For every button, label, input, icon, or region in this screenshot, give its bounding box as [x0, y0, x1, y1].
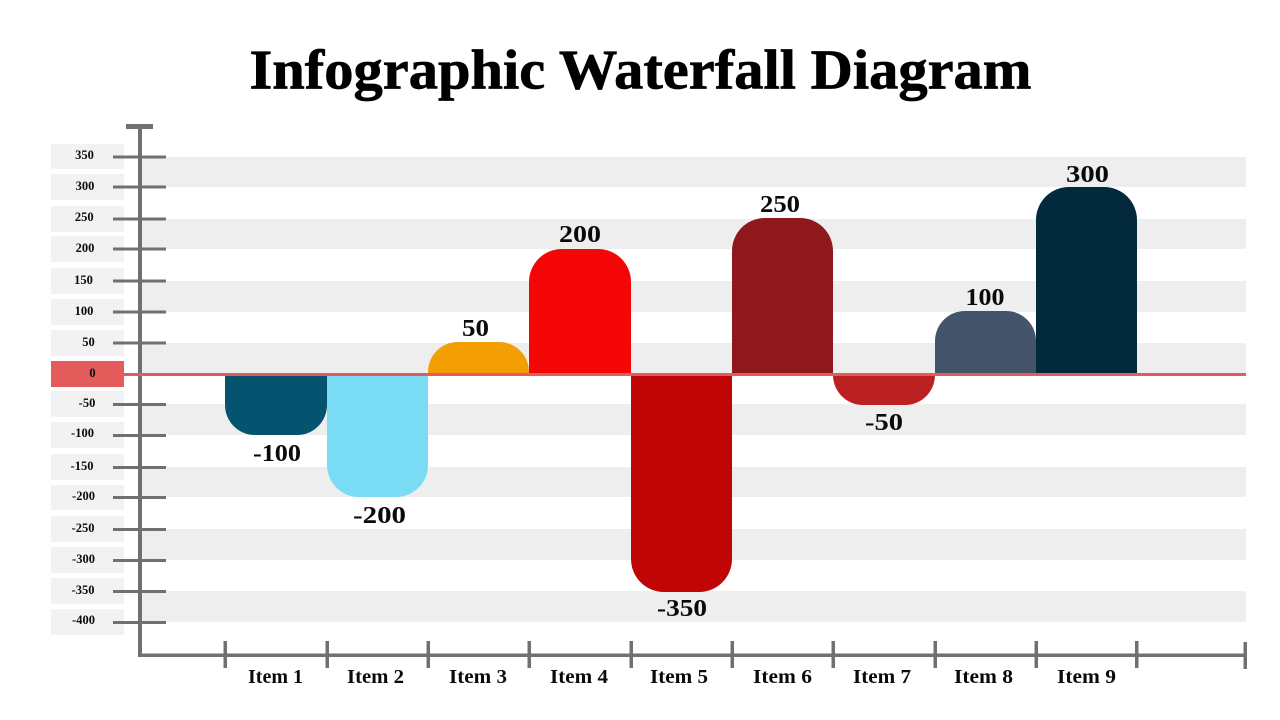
x-axis with ticks: [138, 641, 1247, 669]
bar value labels: 300: [1066, 162, 1109, 188]
y-axis with ticks: [113, 124, 166, 657]
bar value labels: 50: [462, 316, 489, 342]
y-axis value labels: 150: [74, 273, 93, 287]
bar: Item 6, 250: [732, 218, 833, 375]
y-axis value labels: 0: [89, 366, 96, 380]
y-axis value labels: -300: [72, 552, 95, 566]
zero baseline: [124, 373, 1246, 376]
y-axis value labels: 200: [76, 241, 94, 255]
y-axis value labels: 300: [76, 179, 94, 193]
x-axis item labels: Item 9: [1057, 667, 1116, 688]
y-axis value labels: 100: [75, 304, 93, 318]
bar: Item 8, 100: [935, 311, 1036, 375]
y-axis value labels: 250: [75, 210, 94, 224]
bar: Item 5, -350: [631, 375, 732, 592]
bar value labels: -100: [253, 441, 301, 467]
bar: Item 1, -100: [225, 375, 327, 435]
x-axis item labels: [248, 667, 1116, 688]
x-axis item labels: Item 8: [954, 667, 1013, 688]
x-axis item labels: Item 5: [650, 667, 708, 688]
y-axis value labels: -100: [71, 426, 94, 440]
x-axis item labels: Item 1: [248, 667, 303, 688]
x-axis item labels: Item 4: [550, 667, 608, 688]
y-axis value labels: -400: [72, 613, 95, 627]
x-axis item labels: Item 7: [853, 667, 911, 688]
chart background bands: [142, 157, 1246, 622]
bar: Item 9, 300: [1036, 187, 1137, 375]
x-axis item labels: Item 3: [449, 667, 507, 688]
bar value labels: [253, 162, 1109, 622]
bar: Item 7, -50: [833, 375, 935, 405]
y-axis value labels: -150: [71, 459, 93, 473]
bar value labels: -200: [353, 503, 406, 529]
bar: Item 4, 200: [529, 249, 631, 375]
x-axis item labels: Item 2: [347, 667, 404, 688]
y-axis value labels: [51, 144, 124, 635]
bar: Item 3, 50: [428, 342, 529, 375]
x-axis item labels: Item 6: [753, 667, 812, 688]
y-axis value labels: 350: [75, 148, 94, 162]
bar value labels: -50: [865, 410, 903, 436]
bar value labels: 100: [966, 285, 1004, 311]
bar: Item 2, -200: [327, 375, 428, 497]
bar value labels: 200: [559, 222, 601, 248]
y-axis value labels: -200: [72, 489, 95, 503]
bar value labels: 250: [760, 192, 800, 218]
y-axis value labels: -350: [72, 583, 94, 597]
title: Infographic Waterfall Diagram: [250, 40, 1032, 102]
bar value labels: -350: [657, 596, 707, 622]
y-axis value labels: 50: [82, 335, 95, 349]
y-axis value labels: -50: [79, 396, 95, 410]
y-axis value labels: -250: [72, 521, 94, 535]
